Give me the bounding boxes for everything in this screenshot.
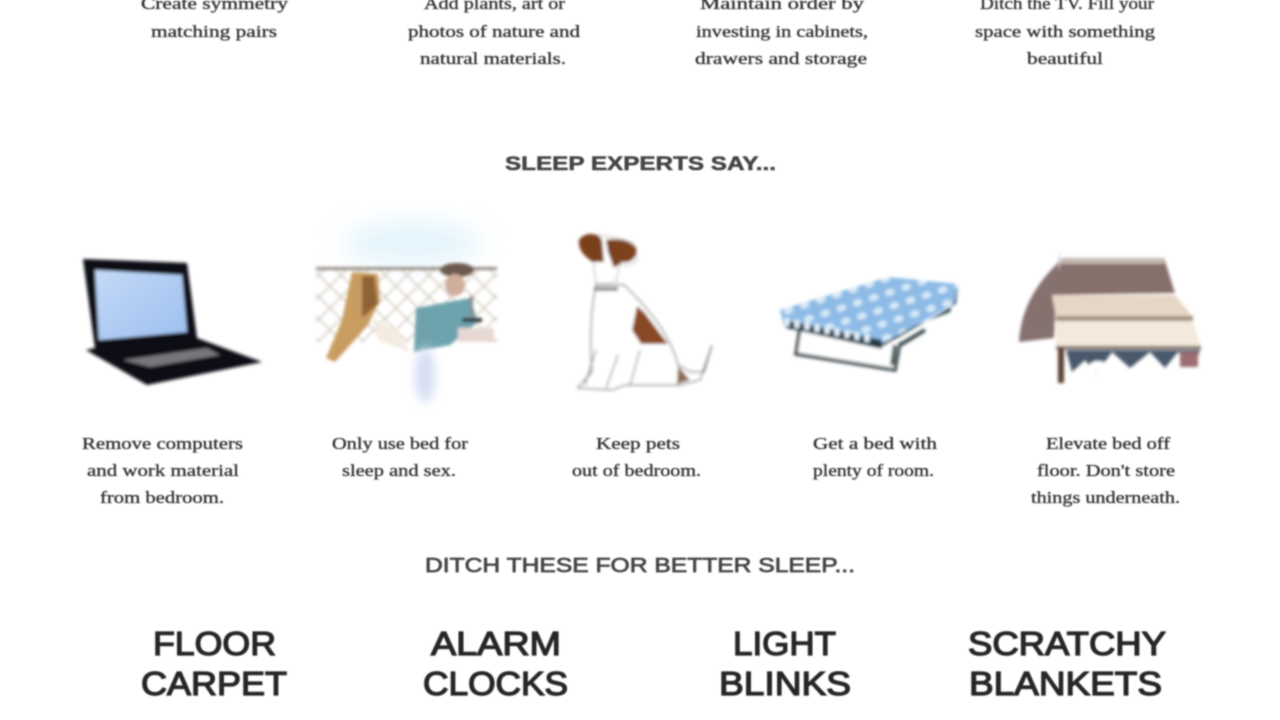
ditch items: [141, 625, 1166, 702]
tip: ditch the TV: beautiful: [1027, 49, 1103, 68]
tip: order: [695, 0, 868, 68]
caption: keep pets out: Keep pets: [596, 434, 680, 453]
tip: ditch the TV: [975, 0, 1156, 68]
caption: get a bed: [813, 434, 938, 480]
caption: get a bed: Get a bed with: [813, 434, 938, 453]
caption: elevate bed: Elevate bed off: [1046, 434, 1170, 453]
item: light blinks: [719, 625, 851, 702]
icon: folding bed: [780, 277, 958, 370]
caption: remove computers: Remove computers: [82, 434, 243, 453]
caption: remove computers: from bedroom.: [100, 488, 224, 507]
top tips captions: [141, 0, 1156, 68]
caption: elevate bed: things underneath.: [1031, 488, 1180, 507]
caption: remove computers: [82, 434, 243, 507]
item: alarm clocks: ALARM: [431, 625, 561, 662]
tip: plants: natural materials.: [420, 49, 566, 68]
tip: order: drawers and storage: [695, 49, 867, 68]
icon: laptop: [83, 259, 262, 385]
icon: bed with stacked blankets: [1019, 252, 1201, 383]
caption: get a bed: plenty of room.: [813, 461, 934, 480]
item: floor carpet: [141, 625, 287, 702]
tip: symmetry: matching pairs: [151, 22, 277, 41]
item: scratchy blankets: SCRATCHY: [968, 625, 1166, 662]
item: floor carpet: CARPET: [141, 665, 287, 702]
caption: only use bed: sleep and sex.: [342, 461, 456, 480]
caption: remove computers: and work material: [87, 461, 239, 480]
caption: elevate bed: floor. Don't store: [1037, 461, 1175, 480]
tip: plants: photos of nature and: [408, 22, 581, 41]
caption: keep pets out: out of bedroom.: [572, 461, 701, 480]
item: scratchy blankets: [968, 625, 1166, 702]
item: light blinks: BLINKS: [719, 665, 851, 702]
item: alarm clocks: [423, 625, 568, 702]
heading: ditch these: DITCH THESE FOR BETTER SLEEP...: [425, 555, 855, 577]
icon: couple in bed: [316, 221, 497, 403]
tip: symmetry: [141, 0, 289, 41]
tip: ditch the TV: space with something: [975, 22, 1156, 41]
heading: sleep experts say: SLEEP EXPERTS SAY...: [505, 154, 776, 175]
caption: keep pets out: [572, 434, 701, 480]
caption: elevate bed: [1031, 434, 1180, 507]
item: scratchy blankets: BLANKETS: [969, 665, 1162, 702]
tip: order: investing in cabinets,: [696, 22, 868, 41]
item: light blinks: LIGHT: [733, 625, 836, 662]
item: alarm clocks: CLOCKS: [423, 665, 568, 702]
caption: only use bed: [332, 434, 468, 480]
caption: only use bed: Only use bed for: [332, 434, 468, 453]
tip: plants: [408, 0, 581, 68]
expert captions: [82, 434, 1180, 507]
item: floor carpet: FLOOR: [153, 625, 276, 662]
icon: dog: [578, 234, 712, 390]
